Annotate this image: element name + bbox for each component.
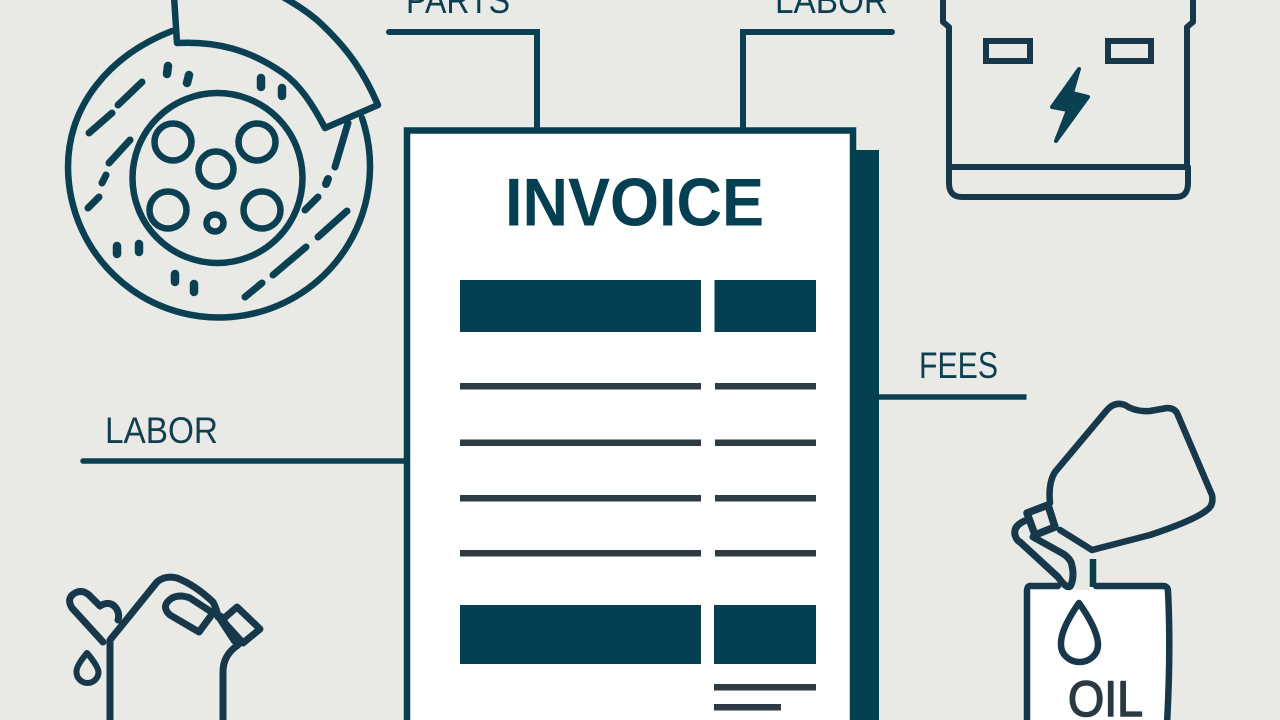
label: parts [389, 0, 537, 128]
icon: oil jug pouring into bottle [1015, 404, 1212, 720]
label: labor left: LABOR [105, 410, 218, 451]
label: labor top [743, 0, 892, 128]
icon: car battery [943, 0, 1193, 197]
total detail lines [714, 684, 816, 710]
invoice document [407, 130, 879, 720]
header row bars [460, 280, 816, 332]
line items [460, 383, 816, 556]
oil bottle [1027, 585, 1168, 720]
label: fees: FEES [919, 345, 998, 386]
icon: jerry can [70, 577, 260, 720]
oil jug [1050, 404, 1212, 550]
icon: brake disc and caliper [68, 0, 378, 317]
invoice title: INVOICE [505, 164, 764, 240]
total row bars [460, 605, 816, 664]
